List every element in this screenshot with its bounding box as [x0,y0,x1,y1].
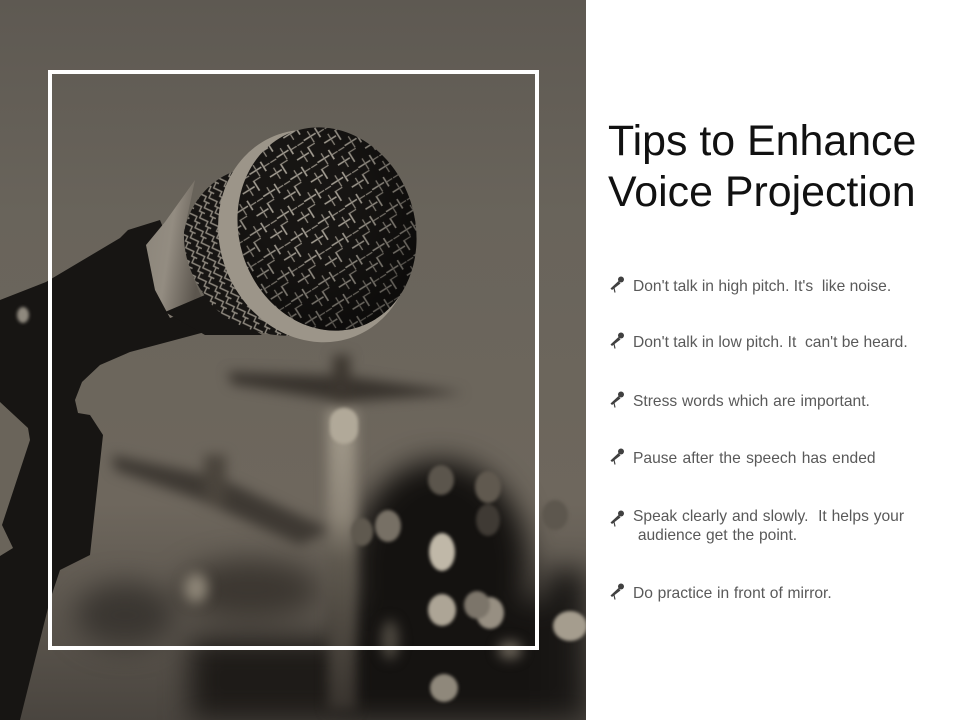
photo: microphone and drum kit [0,0,586,720]
title: Voice Projection [608,168,916,216]
blurred cymbals and drums [75,355,587,720]
white frame [48,70,539,650]
microphone head [146,100,444,372]
title [608,117,916,216]
microphone stand and handle [0,220,205,720]
tip 6: Do practice in front of mirror. [633,585,832,602]
title: Tips to Enhance [608,117,916,165]
tip 2: Don't talk in low pitch. It can't be heard. [633,334,908,351]
tip 3: Stress words which are important. [633,393,870,410]
tip 4: Pause after the speech has ended [633,450,876,467]
tip 1: Don't talk in high pitch. It's like noise. [633,278,891,295]
tip 5: Speak clearly and slowly. It helps your audience get the point. [633,508,904,544]
